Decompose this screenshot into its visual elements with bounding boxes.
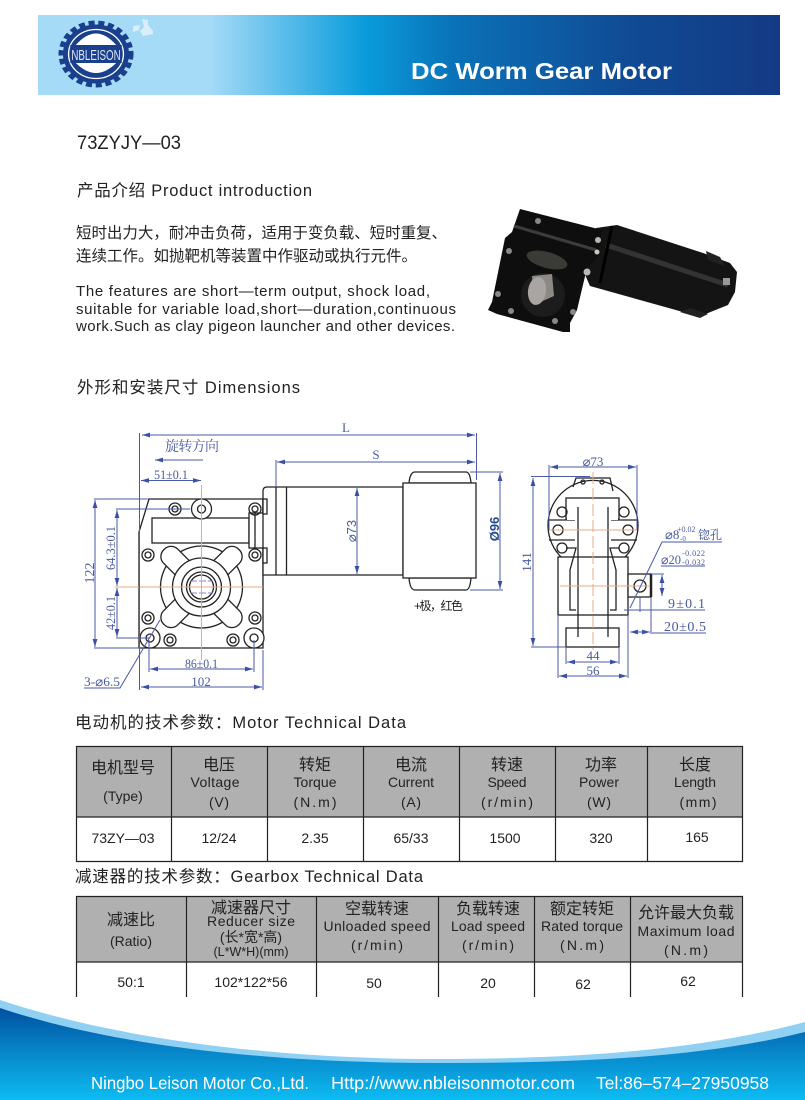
end view outline [548, 472, 651, 650]
side view dimensions: S [372, 447, 380, 462]
column: unloaded speed: 50 [366, 975, 382, 991]
heading: product introduction: 产品介绍 Product introduction [77, 181, 312, 200]
product photo: worm gear motor [488, 209, 737, 332]
side view dimensions: ⌀73 [344, 520, 359, 542]
column: reducer size: (长*宽*高) [220, 929, 282, 945]
column: maximum load: Maximum load [638, 923, 734, 939]
column: unloaded speed: 空载转速 [345, 900, 409, 918]
column: rated torque [541, 900, 623, 992]
drawing: side view of motor with dimensions [263, 420, 503, 613]
column: torque: 转矩 [299, 756, 331, 774]
heading: motor technical data: 电动机的技术参数：Motor Technical Data [75, 713, 407, 732]
end view dimensions: -0.032 [682, 558, 705, 567]
column: rated torque: 额定转矩 [550, 900, 614, 918]
model number: 73ZYJY—03 [77, 133, 181, 154]
column: load speed: 20 [480, 975, 496, 991]
column: length: (mm) [680, 794, 716, 810]
column: speed: 转速 [491, 756, 523, 774]
column: ratio [107, 911, 155, 990]
column: reducer size: 102*122*56 [214, 974, 288, 990]
column: length: Length [674, 774, 716, 790]
column: load speed: Load speed [451, 918, 525, 934]
Chinese description [76, 224, 447, 265]
column: power: (W) [587, 794, 611, 810]
column: speed: Speed [488, 774, 526, 790]
side view dimensions: L [342, 420, 350, 435]
telephone: Tel:86–574–27950958 [596, 1073, 769, 1093]
front view dimensions: 42±0.1 [103, 596, 118, 630]
column: voltage: Voltage [190, 774, 240, 790]
column: type: (Type) [103, 788, 143, 804]
column: load speed: 负载转速 [456, 900, 520, 918]
banner title: DC Worm Gear Motor [411, 58, 672, 84]
column: length: 165 [685, 829, 709, 845]
front view dimensions [83, 433, 340, 690]
column: current: 65/33 [393, 830, 429, 846]
drawing: front view of gearbox with dimensions [83, 433, 340, 690]
column: torque: 2.35 [301, 830, 329, 846]
end view dimensions: 锪孔 [698, 527, 722, 542]
header banner [38, 15, 780, 95]
English description: The features are short—term output, shock load, [76, 283, 430, 300]
column: reducer size: 减速器尺寸 [211, 899, 291, 917]
English description [75, 283, 456, 335]
column: ratio: 减速比 [107, 911, 155, 929]
column: rated torque: Rated torque [541, 918, 623, 934]
end view dimensions: 56 [586, 663, 600, 678]
column: load speed [451, 900, 525, 991]
column: power [579, 756, 619, 846]
column: current: 电流 [395, 756, 427, 774]
end view dimensions: -0 [680, 535, 686, 543]
column: type: 73ZY—03 [91, 830, 155, 846]
front view dimensions: 3-⌀6.5 [84, 674, 120, 689]
heading: gearbox technical data: 减速器的技术参数：Gearbox Technical Data [75, 867, 424, 886]
icon: company gear logo [61, 23, 131, 85]
column: voltage: 12/24 [201, 830, 237, 846]
Chinese description: 连续工作。如抛靶机等装置中作驱动或执行元件。 [76, 247, 417, 265]
column: length: 长度 [679, 756, 711, 774]
end view dimensions: ⌀8 [665, 527, 679, 542]
column: current [388, 756, 434, 846]
column: unloaded speed [324, 900, 430, 991]
column: reducer size [207, 899, 295, 990]
column: torque: Torque [294, 774, 337, 790]
end view dimensions: ⌀20 [661, 552, 681, 567]
table: motor technical data [76, 746, 743, 862]
column: type [91, 759, 155, 846]
motor body outline [263, 472, 476, 590]
Chinese description: 短时出力大，耐冲击负荷，适用于变负载、短时重复、 [76, 224, 447, 242]
column: ratio: (Ratio) [110, 933, 152, 949]
column: current: (A) [401, 794, 421, 810]
end view dimensions: 9±0.1 [668, 597, 705, 612]
heading: dimensions: 外形和安装尺寸 Dimensions [77, 378, 300, 397]
end view dimensions: 141 [519, 552, 534, 572]
column: load speed: (r/min) [462, 937, 514, 953]
end view dimensions: +0.02 [677, 525, 696, 534]
column: maximum load: (N.m) [664, 942, 708, 958]
column: rated torque: 62 [575, 976, 591, 992]
column: type: 电机型号 [91, 759, 155, 777]
column: speed [481, 756, 533, 846]
front view dimensions: 122 [83, 562, 98, 584]
English description: work.Such as clay pigeon launcher and other devices. [75, 318, 455, 335]
footer band [0, 1000, 805, 1100]
website: Http://www.nbleisonmotor.com [331, 1073, 575, 1093]
column: torque: (N.m) [294, 794, 336, 810]
column: speed: 1500 [489, 830, 521, 846]
column: rated torque: (N.m) [560, 937, 604, 953]
front view dimensions: 102 [191, 674, 211, 689]
end view dimensions: 20±0.5 [664, 620, 706, 635]
column: maximum load: 允许最大负载 [638, 904, 734, 922]
column: voltage: 电压 [203, 756, 235, 774]
column: current: Current [388, 774, 434, 790]
front view dimensions: 旋转方向 [165, 439, 219, 455]
end view dimensions: -0.022 [682, 549, 705, 558]
column: length [674, 756, 716, 845]
company name: Ningbo Leison Motor Co.,Ltd. [91, 1073, 309, 1093]
column: power: 320 [589, 830, 613, 846]
end view dimensions [519, 454, 722, 678]
end view dimensions: 44 [586, 648, 600, 663]
English description: suitable for variable load,short—duration,continuous [76, 301, 456, 318]
table: gearbox technical data [76, 896, 743, 997]
side view dimensions: Ø96 [487, 517, 502, 541]
column: maximum load [638, 904, 734, 989]
front view dimensions: 86±0.1 [185, 656, 218, 671]
polarity note: +极，红色 [414, 598, 463, 613]
column: power: 功率 [585, 756, 617, 774]
drawing: end view of gearbox with dimensions [519, 454, 722, 678]
column: speed: (r/min) [481, 794, 533, 810]
end view dimensions: ⌀73 [583, 454, 603, 469]
column: reducer size: (L*W*H)(mm) [214, 945, 288, 959]
front view dimensions: 51±0.1 [154, 467, 188, 482]
column: unloaded speed: Unloaded speed [324, 918, 430, 934]
column: voltage [190, 756, 240, 846]
column: torque [294, 756, 337, 846]
column: unloaded speed: (r/min) [351, 937, 403, 953]
column: reducer size: Reducer size [207, 913, 295, 929]
icon: British Isles map mark [133, 19, 153, 36]
column: voltage: (V) [209, 794, 229, 810]
column: ratio: 50:1 [117, 974, 145, 990]
icon: company gear logo: NBLEISON [71, 48, 121, 64]
side view dimensions [276, 420, 503, 590]
front view dimensions: 64.3±0.1 [103, 526, 118, 570]
column: power: Power [579, 774, 619, 790]
column: maximum load: 62 [680, 973, 696, 989]
gearbox body outline [115, 485, 266, 660]
